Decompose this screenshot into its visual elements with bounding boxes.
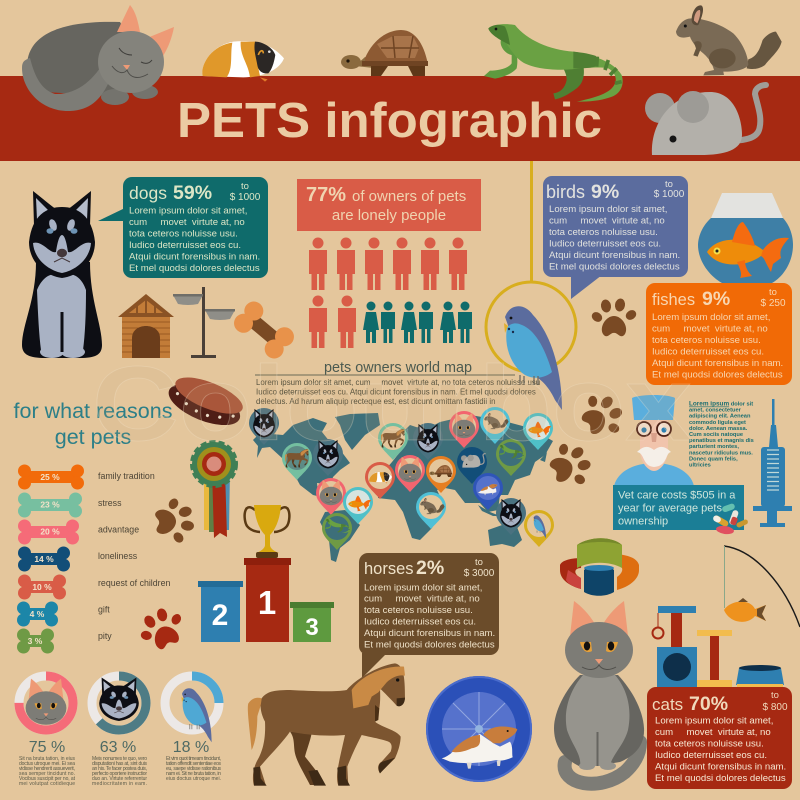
panel: vet care cost: ownership (618, 516, 668, 528)
callout: dogs: cum movet virtute at, no (129, 217, 245, 228)
donut chart: dogs 63%: disputationi has at, sint duis (92, 761, 148, 767)
cat bowl (736, 665, 784, 687)
callout: dogs: Lorem ipsum dolor sit amet, (129, 206, 247, 216)
map description: Lorem ipsum dolor sit amet, cum movet virtute at, no tota ceteros noluisse usu (256, 378, 540, 387)
map description (256, 378, 540, 406)
callout: birds (543, 176, 688, 299)
callout: horses: $ 3000 (464, 568, 495, 579)
donut chart: cats 75%: mei volutpat cotidieque (19, 781, 75, 787)
callout: dogs: to (241, 181, 249, 192)
callout: horses: Lorem ipsum dolor sit amet, (364, 582, 482, 594)
donut chart: dogs 63%: 63 % (100, 739, 136, 756)
rosette award (192, 442, 236, 538)
callout: fishes: Et mel quodsi dolores delectus (652, 370, 783, 380)
panel: 77% statistic: are lonely people (332, 207, 446, 224)
callout: fishes: Lorem ipsum dolor sit amet, (652, 312, 770, 323)
paw print: brown top (590, 298, 638, 336)
callout: horses: Atqui dicunt forensibus in nam. (364, 628, 495, 639)
callout: dogs: 59% (173, 182, 212, 204)
podium: 3 (305, 614, 319, 641)
fishing rod toy (724, 546, 800, 627)
bone chart: reasons to get pets: 25 % (40, 472, 60, 482)
donut chart: dogs 63%: duo an. Virtute referrentur (92, 776, 147, 782)
vet note text: parturient montes, (689, 444, 739, 450)
food bowls on stand (173, 287, 235, 358)
callout: horses: tota ceteros noluisse usu. (364, 605, 473, 616)
callout: dogs: Et mel quodsi dolores delectus (129, 263, 260, 274)
vet note text: penatibus et magnis dis (689, 438, 754, 444)
callout: birds: tota ceteros noluisse usu. (549, 227, 658, 238)
donut chart: cats 75%: vidisse hendrerit assueverit, (19, 766, 75, 772)
bone chart: reasons to get pets (17, 464, 84, 654)
callout: dogs: tota ceteros noluisse usu. (129, 228, 238, 240)
pictogram: owners, men and women (309, 238, 472, 348)
vet note text: Lorem ipsum dolor sit (689, 400, 753, 408)
reason labels: stress (98, 498, 122, 508)
watermark: Colourbox (92, 345, 692, 463)
bone chart: reasons to get pets: 3 % (28, 636, 43, 646)
callout: horses: Iudico deterruisset eos cu. (364, 616, 476, 628)
reason labels: gift (98, 604, 110, 614)
3d pie pieces (560, 538, 639, 596)
callout: dogs: Atqui dicunt forensibus in nam. (129, 252, 260, 262)
dog house (118, 294, 174, 358)
pills (712, 503, 749, 535)
vet note text (689, 400, 754, 468)
paw print: brown left (154, 495, 196, 546)
donut chart: cats 75%: Sit na bruta tation, in eius (19, 756, 76, 762)
syringe (753, 399, 792, 527)
callout: dogs: $ 1000 (230, 192, 261, 203)
callout: cats: cum movet virtute at, no (655, 727, 771, 738)
panel: 77% statistic (297, 179, 481, 231)
bone chart: reasons to get pets: 14 % (34, 554, 54, 564)
callout: horses: to (475, 557, 483, 568)
podium (198, 558, 334, 642)
trophy (245, 505, 289, 558)
callout: cats: Et mel quodsi dolores delectus (655, 773, 786, 784)
map description: Iudico deterruisset eos cu. Atqui dicunt forensibus in nam. Et mel quodsi dolores (256, 388, 536, 396)
reason labels: request of children (98, 578, 170, 588)
podium: 2 (212, 599, 228, 632)
callout: cats: to (771, 690, 779, 701)
sleeping cat (22, 5, 174, 111)
donut chart: birds 18%: 18 % (173, 739, 209, 756)
callout: birds: Iudico deterruisset eos cu. (549, 238, 661, 250)
callout: birds: Atqui dicunt forensibus in nam. (549, 250, 680, 261)
bone chart: reasons to get pets: 4 % (30, 609, 45, 619)
vet note text: adipiscing elit. Aenean (689, 414, 751, 420)
bone treat (230, 298, 298, 362)
horse (248, 663, 405, 786)
callout: horses: horses (364, 560, 414, 578)
collar (163, 369, 248, 434)
callout: fishes: $ 250 (760, 298, 786, 309)
map pins with pets (249, 407, 554, 550)
donut chart: birds 18%: eius doctus utroque mei. (166, 776, 221, 782)
mouse (645, 85, 766, 155)
callout: cats: $ 800 (762, 702, 788, 713)
callout: birds: to (665, 179, 673, 190)
map description: delectus. Ad harum aliquip recteque est, est dicunt omittam fastidii in (256, 397, 495, 406)
reasons heading: for what reasons (14, 399, 172, 423)
panel: 77% statistic: 77% (306, 184, 346, 206)
donut chart: birds 18% (165, 676, 222, 782)
callout: horses: Et mel quodsi dolores delectus (364, 640, 495, 650)
callout: fishes: tota ceteros noluisse usu. (652, 335, 761, 346)
callout: birds: cum movet virtute at, no (549, 216, 665, 226)
reasons heading: get pets (55, 425, 131, 449)
donut chart: dogs 63%: perfecto oportere instructior (92, 771, 147, 777)
fish bowl (698, 193, 793, 284)
bird hanging line (530, 161, 533, 283)
callout: fishes (646, 283, 792, 385)
donut chart: dogs 63%: Meis nonumes te quo, vero (92, 756, 147, 762)
bone chart: reasons to get pets: 10 % (32, 582, 52, 592)
donut chart: birds 18%: eu, saepe vidisse rationibus (166, 766, 222, 772)
callout: dogs: dogs (129, 183, 167, 203)
title banner (0, 76, 800, 161)
guinea pig (202, 41, 284, 82)
vet note text: nascetur ridiculus mus. (689, 450, 753, 456)
callout: fishes: fishes (652, 291, 695, 309)
reason labels: pity (98, 631, 112, 641)
reasons heading (14, 399, 172, 449)
panel: vet care cost: year for average pets (618, 502, 722, 514)
callout: birds: $ 1000 (654, 189, 685, 200)
callout: birds: 9% (591, 181, 619, 203)
callout: fishes: Atqui dicunt forensibus in nam. (652, 358, 783, 369)
callout: cats: cats (652, 695, 683, 714)
callout: cats: 70% (689, 693, 728, 715)
callout: fishes: to (769, 287, 777, 298)
donut chart: cats 75%: 75 % (29, 739, 65, 756)
callout: fishes: Iudico deterruisset eos cu. (652, 346, 764, 358)
panel: vet care cost: Vet care costs $505 in a (618, 490, 736, 502)
donut chart: birds 18%: tation offendit sententiae eos (166, 761, 222, 767)
sitting cat (554, 601, 644, 784)
callout: cats: Atqui dicunt forensibus in nam. (655, 762, 786, 772)
vet note text: amet, consectetuer (689, 408, 742, 414)
donut chart: cats 75% (19, 676, 76, 787)
callout: dogs (98, 177, 268, 278)
donut chart: cats 75%: Vocibus suscipit per no, at (19, 776, 76, 782)
podium: 1 (258, 584, 276, 621)
vet doctor (614, 395, 694, 486)
reason labels: advantage (98, 524, 139, 534)
donut chart: cats 75%: doctus utroque mei. Ei sea (19, 761, 75, 767)
cat tree (652, 606, 732, 687)
callout: fishes: 9% (702, 288, 730, 310)
panel: vet care cost (613, 485, 744, 530)
donut chart: birds 18%: Et vim quot timeam tincidunt, (166, 756, 221, 762)
donut chart: dogs 63%: mediocritatem in eam. (92, 781, 147, 787)
donut chart: dogs 63%: an his. Te facer postea duis, (92, 766, 147, 772)
reason labels: family tradition (98, 471, 155, 481)
callout: horses: cum movet virtute at, no (364, 594, 480, 604)
vet note text: dolor. Aenean massa. (689, 426, 748, 432)
callout: fishes: cum movet virtute at, no (652, 324, 768, 334)
world map (253, 413, 553, 562)
vet note text: Cum sociis natoque (689, 432, 743, 438)
reason labels (98, 471, 170, 641)
iguana (484, 24, 623, 102)
vet note text: ultricies (689, 462, 711, 468)
tortoise (341, 30, 428, 76)
map heading: pets owners world map (324, 360, 472, 376)
callout: cats (647, 687, 792, 789)
vet note text: commodo ligula eget (689, 420, 746, 426)
panel: 77% statistic: of owners of pets (352, 188, 466, 205)
callout: birds: Et mel quodsi dolores delectus (549, 262, 680, 272)
vet note text: Donec quam felis, (689, 456, 738, 462)
bone chart: reasons to get pets: 20 % (40, 526, 60, 536)
paw print: red (132, 601, 192, 656)
hamster wheel (426, 676, 532, 782)
callout: horses (359, 553, 499, 678)
title: PETS infographic (177, 94, 602, 148)
paw print: brown lower (543, 435, 598, 495)
donut chart: dogs 63% (92, 676, 148, 787)
chinchilla (676, 5, 782, 75)
bird in ring (486, 282, 576, 410)
donut chart: cats 75%: sea semper tincidunt no. (19, 771, 75, 777)
bone chart: reasons to get pets: 23 % (40, 500, 60, 510)
callout: dogs: Iudico deterruisset eos cu. (129, 240, 241, 251)
callout: cats: tota ceteros noluisse usu. (655, 738, 764, 750)
callout: birds: birds (546, 182, 585, 202)
callout: birds: Lorem ipsum dolor sit amet, (549, 204, 667, 215)
callout: cats: Iudico deterruisset eos cu. (655, 750, 767, 761)
callout: horses: 2% (416, 557, 444, 579)
reason labels: loneliness (98, 551, 138, 561)
paw print: brown middle (573, 384, 632, 446)
callout: cats: Lorem ipsum dolor sit amet, (655, 716, 773, 726)
donut chart: birds 18%: nam ei. Sit ne bruta tation, in (166, 771, 221, 777)
husky dog (22, 191, 102, 358)
